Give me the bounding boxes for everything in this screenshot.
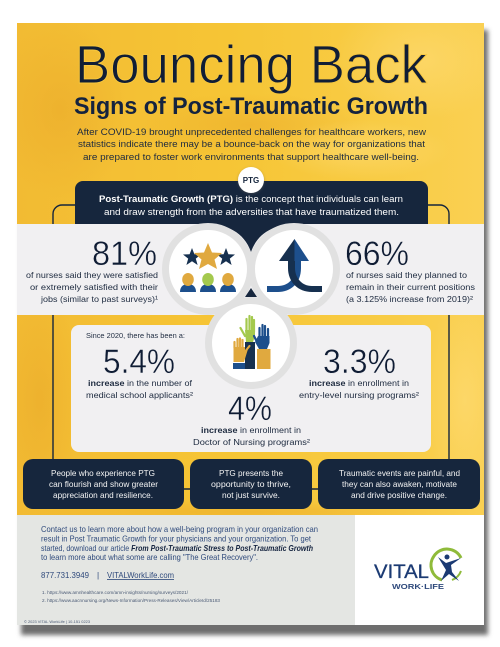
panel: footer logo area	[355, 515, 484, 625]
contact details: VITALWorkLife.com	[107, 571, 174, 580]
panel: footer contact	[17, 515, 355, 625]
callout: flourish: can flourish and show greater	[49, 479, 158, 489]
callout: thrive: opportunity to thrive,	[211, 479, 291, 489]
stat: 5.4%	[86, 343, 193, 400]
contact paragraph: result in Post Traumatic Growth for your physicians and your organization. To get	[41, 534, 312, 544]
stat: 4%: Doctor of Nursing programs²	[193, 437, 310, 447]
panel: PTG definition	[75, 181, 428, 252]
callout: traumatic events	[318, 459, 480, 509]
stat: 66%: (a 3.125% increase from 2019)²	[346, 294, 473, 304]
stat: 81%	[26, 235, 158, 304]
definition text	[99, 194, 403, 218]
definition text: Post-Traumatic Growth (PTG) is the concept that individuals can learn	[99, 194, 403, 205]
stat: 66%: of nurses said they planned to	[346, 270, 467, 280]
footnotes: 2. https://www.aacnnursing.org/News-Information/Press-Releases/View/ArticleId/25183	[42, 598, 221, 603]
intro paragraph	[77, 127, 426, 163]
stat: 66%: remain in their current positions	[346, 282, 475, 292]
stat: 3.3%: 3.3%	[323, 343, 396, 381]
stat: 66%	[345, 235, 475, 304]
logo: VITAL WorkLife: WORK·LIFE	[392, 584, 444, 591]
stat: 81%: 81%	[92, 235, 157, 273]
stat: 5.4%: increase in the number of	[88, 378, 193, 388]
circle: merging arrow	[252, 226, 336, 312]
stat: 5.4%: medical school applicants²	[86, 390, 193, 400]
stat: 4%	[193, 390, 310, 447]
logo ring lower	[452, 571, 461, 580]
badge: PTG: PTG	[243, 176, 259, 185]
connector lines between boxes	[184, 488, 318, 490]
contact details	[41, 571, 174, 580]
callout: flourish: appreciation and resilience.	[53, 490, 153, 500]
footnotes: 1. https://www.amnhealthcare.com/amn-insights/nursing/surveys/2021/	[42, 590, 189, 595]
callout: traumatic events: they can also awaken, motivate	[342, 479, 457, 489]
stat: 4%: increase in enrollment in	[201, 425, 301, 435]
icon: arrow	[267, 239, 322, 292]
logo figure	[438, 554, 461, 581]
stat: 3.3%: entry-level nursing programs²	[299, 390, 419, 400]
icon: stars	[183, 243, 235, 269]
circle: raised hands	[208, 300, 294, 386]
title: Bouncing Back	[75, 35, 428, 95]
stat: 5.4%: 5.4%	[103, 343, 175, 381]
stat: 66%: 66%	[345, 235, 409, 273]
stat: 3.3%	[299, 343, 419, 400]
callout: flourish: People who experience PTG	[51, 468, 155, 478]
logo: VITAL WorkLife	[374, 549, 461, 591]
copyright: © 2023 VITAL WorkLife | 10-151 0223	[24, 620, 90, 624]
connector outline frame	[53, 205, 449, 460]
definition text: and draw strength from the adversities that have traumatized them.	[104, 207, 399, 218]
callout: thrive	[190, 459, 312, 509]
contact paragraph: to learn more about what some are calling "The Great Recovery".	[41, 553, 258, 562]
logo ring	[431, 549, 461, 580]
logo: VITAL WorkLife: VITAL	[374, 562, 429, 583]
contact paragraph: Contact us to learn more about how a well-being program in your organization can	[41, 525, 318, 534]
intro paragraph: are prepared to foster work environments that support healthcare well-being.	[83, 152, 419, 163]
yellow background panel	[17, 23, 484, 515]
contact details: 877.731.3949	[41, 571, 89, 580]
panel: gray stats band	[17, 224, 484, 315]
panel: enrollment stats	[71, 325, 431, 452]
text: since 2020: Since 2020, there has been a:	[86, 331, 185, 340]
circle: stars and people	[166, 226, 250, 312]
subtitle: Signs of Post-Traumatic Growth	[74, 93, 428, 120]
intro paragraph: statistics indicate there may be a bounce-back on the way for organizations that	[78, 139, 425, 150]
contact paragraph: started, download our article From Post-Traumatic Stress to Post-Traumatic Growth	[41, 544, 313, 553]
contact paragraph	[41, 525, 318, 562]
stat: 4%: 4%	[228, 390, 272, 428]
callout: thrive: not just survive.	[222, 490, 280, 500]
stat: 81%: jobs (similar to past surveys)¹	[40, 294, 158, 304]
footnotes	[42, 590, 221, 603]
callout: flourish	[23, 459, 184, 509]
badge: PTG	[238, 167, 264, 193]
contact details: |	[97, 571, 99, 580]
callout: traumatic events: and drive positive change.	[351, 490, 447, 500]
intro paragraph: After COVID-19 brought unprecedented challenges for healthcare workers, new	[77, 127, 426, 138]
icon: hands	[233, 316, 270, 369]
icon: people	[180, 273, 236, 292]
callout: traumatic events: Traumatic events are painful, and	[339, 468, 460, 478]
callout: thrive: PTG presents the	[219, 468, 283, 478]
stat: 3.3%: increase in enrollment in	[309, 378, 409, 388]
small triangle between circles	[245, 288, 257, 297]
stat: 81%: of nurses said they were satisfied	[26, 270, 158, 280]
stat: 81%: or extremely satisfied with their	[30, 282, 158, 292]
